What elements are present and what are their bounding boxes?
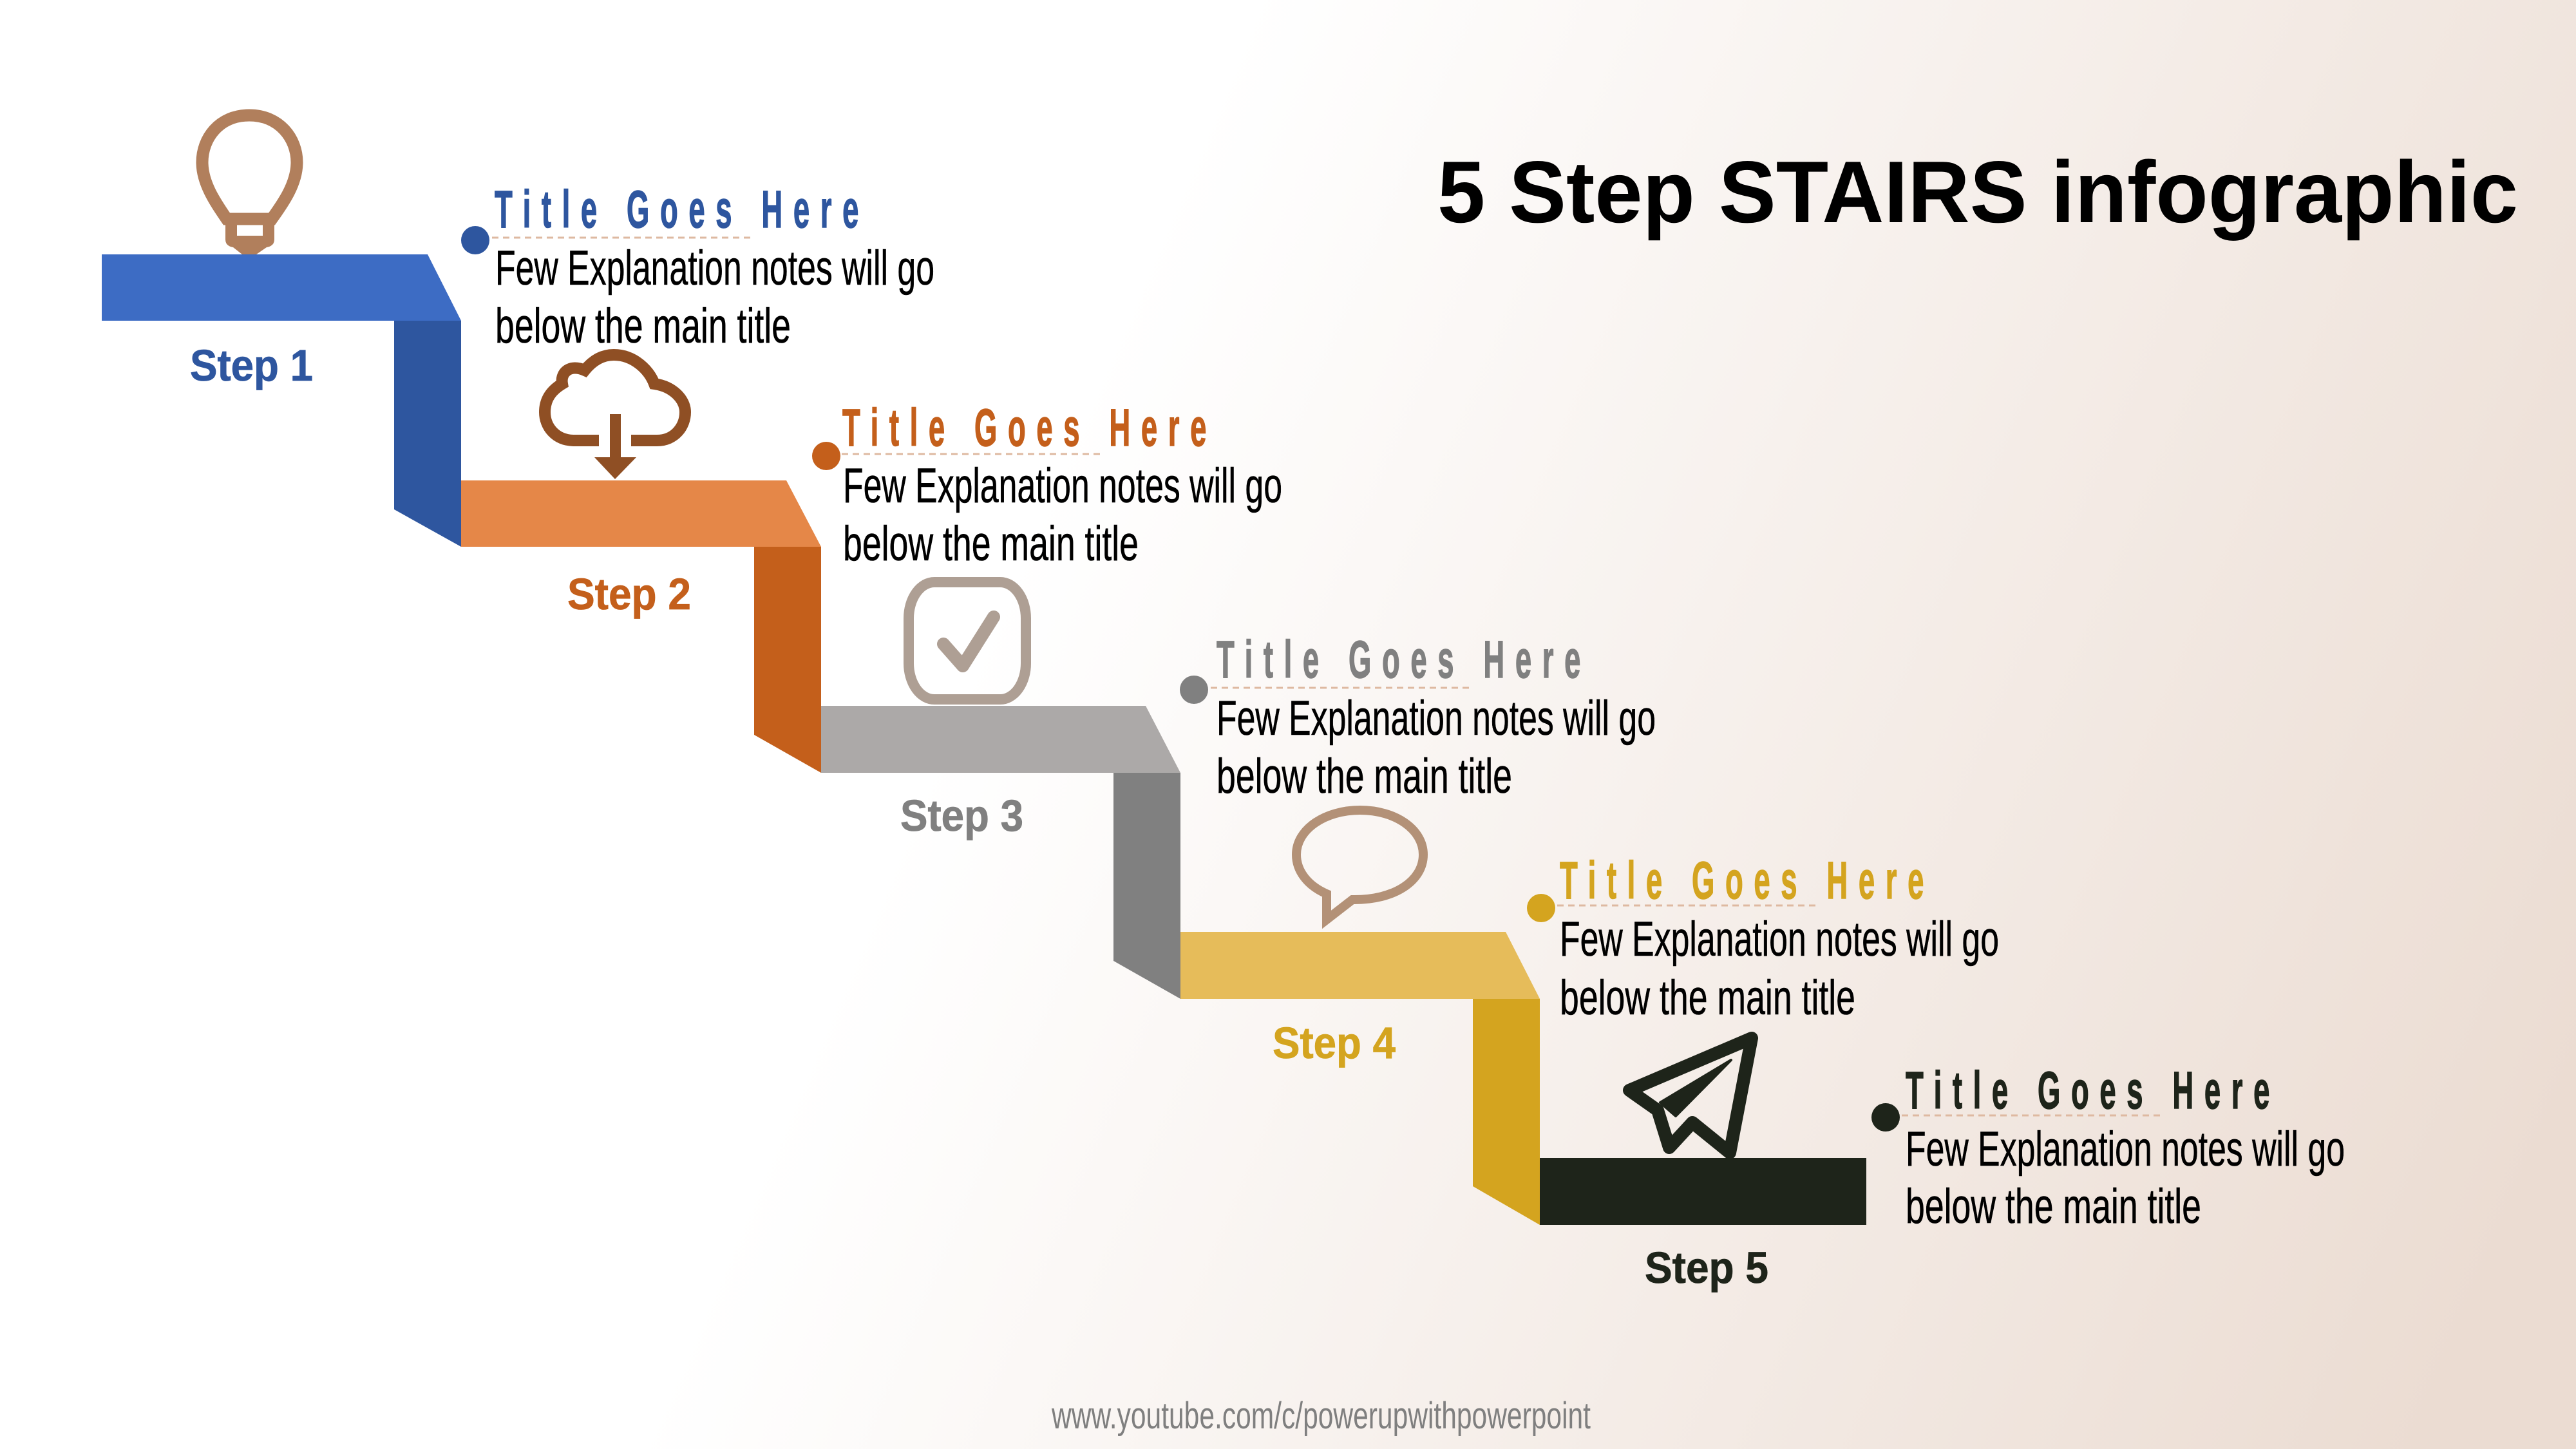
text block: step 2 [812, 399, 1282, 571]
text block: step 3: Title Goes Here [1217, 630, 1591, 689]
text block: step 4: Title Goes Here [1560, 851, 1935, 910]
icon: light bulb [202, 115, 297, 254]
stair step 5 [1540, 1158, 1866, 1225]
icon: speech bubble [1296, 810, 1423, 920]
stair step 1 [102, 254, 461, 547]
icon: cloud download [545, 355, 685, 479]
stair step 2 [461, 480, 821, 773]
text block: step 4: Few Explanation notes will go [1560, 912, 1999, 967]
text block: step 5: Few Explanation notes will go [1906, 1122, 2345, 1177]
text block: step 1: below the main title [495, 299, 791, 354]
stair step 3 [821, 706, 1180, 999]
text block: step 3: Few Explanation notes will go [1217, 691, 1656, 746]
step label 4: Step 4 [1273, 1018, 1396, 1068]
step label 5: Step 5 [1645, 1243, 1768, 1293]
text block: step 1: Title Goes Here [495, 180, 869, 239]
icon: checkbox [909, 582, 1026, 699]
text block: step 1: Few Explanation notes will go [495, 241, 934, 296]
text block: step 4: below the main title [1560, 971, 1855, 1025]
title: 5 Step STAIRS infographic [1437, 143, 2518, 241]
icon: paper plane [1629, 1038, 1752, 1153]
text block: step 2: Title Goes Here [842, 399, 1217, 457]
footer url: www.youtube.com/c/powerupwithpowerpoint [1051, 1395, 1591, 1437]
step label 2: Step 2 [567, 569, 691, 619]
text block: step 5: below the main title [1906, 1179, 2201, 1234]
step label 3: Step 3 [900, 791, 1023, 840]
text block: step 2: Few Explanation notes will go [843, 459, 1282, 513]
text block: step 5 [1871, 1061, 2345, 1234]
text block: step 5: Title Goes Here [1906, 1061, 2280, 1120]
text block: step 4 [1527, 851, 1999, 1025]
text block: step 1 [461, 180, 934, 354]
text block: step 2: below the main title [843, 516, 1139, 571]
step label 1: Step 1 [190, 341, 313, 390]
text block: step 3: below the main title [1217, 749, 1512, 804]
text block: step 3 [1180, 630, 1656, 804]
stair step 4 [1180, 932, 1540, 1225]
